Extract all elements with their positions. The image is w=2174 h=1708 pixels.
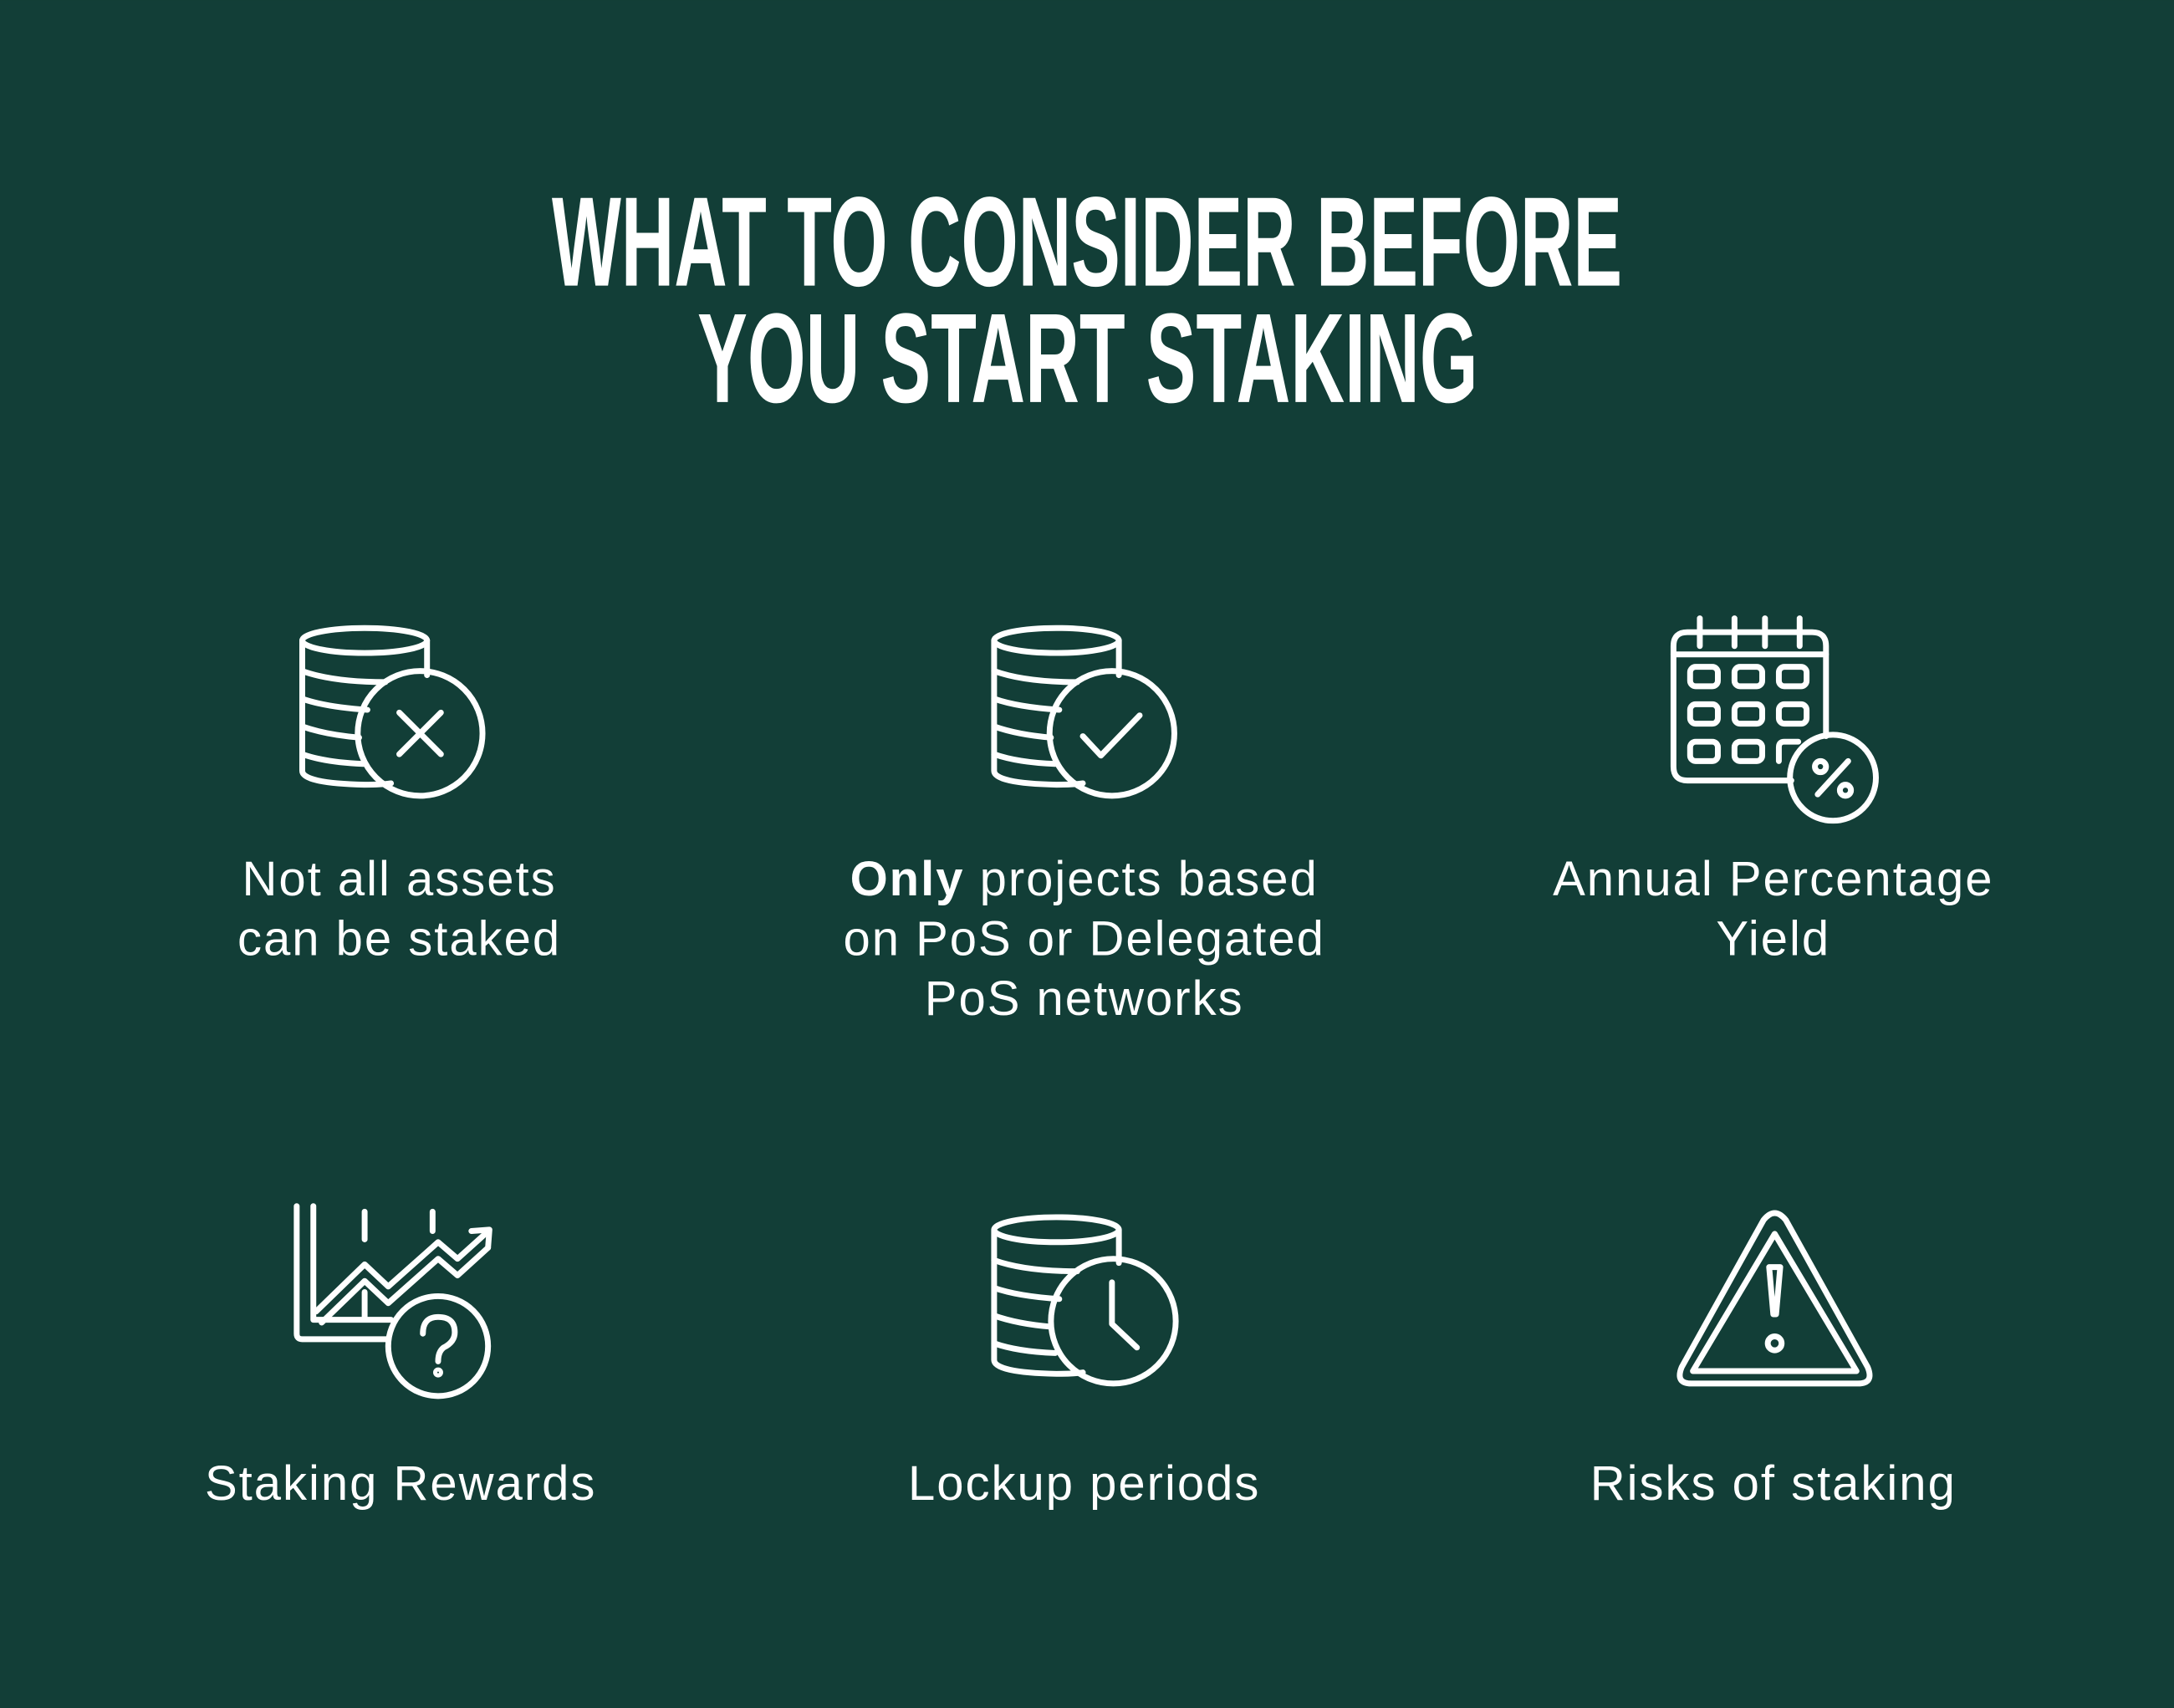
text: APY: Annual Percentage [1553, 852, 1993, 906]
icon: chart with question [297, 1206, 489, 1396]
text: risks: Risks of staking [1590, 1456, 1957, 1511]
icon: coins with clock [994, 1217, 1176, 1384]
text: only projects: on PoS or Delegated [843, 912, 1325, 966]
text: not all assets [237, 852, 561, 966]
text: staking rewards: Staking Rewards [205, 1456, 596, 1511]
icon: warning triangle [1680, 1213, 1870, 1384]
text: not all assets: can be staked [237, 912, 561, 966]
icon: coins with x [302, 628, 482, 796]
text: only projects: Only projects based [850, 852, 1319, 906]
text: only projects [843, 852, 1325, 1026]
icon: calendar percent [1673, 619, 1875, 821]
title [552, 171, 1622, 430]
text: not all assets: Not all assets [242, 852, 557, 906]
icon: coins with check [994, 628, 1174, 796]
text: APY: Yield [1716, 912, 1830, 966]
text: APY [1553, 852, 1993, 966]
text: lockup periods: Lockup periods [908, 1456, 1260, 1511]
text: only projects: PoS networks [925, 971, 1244, 1026]
title: YOU START STAKING [697, 288, 1478, 430]
